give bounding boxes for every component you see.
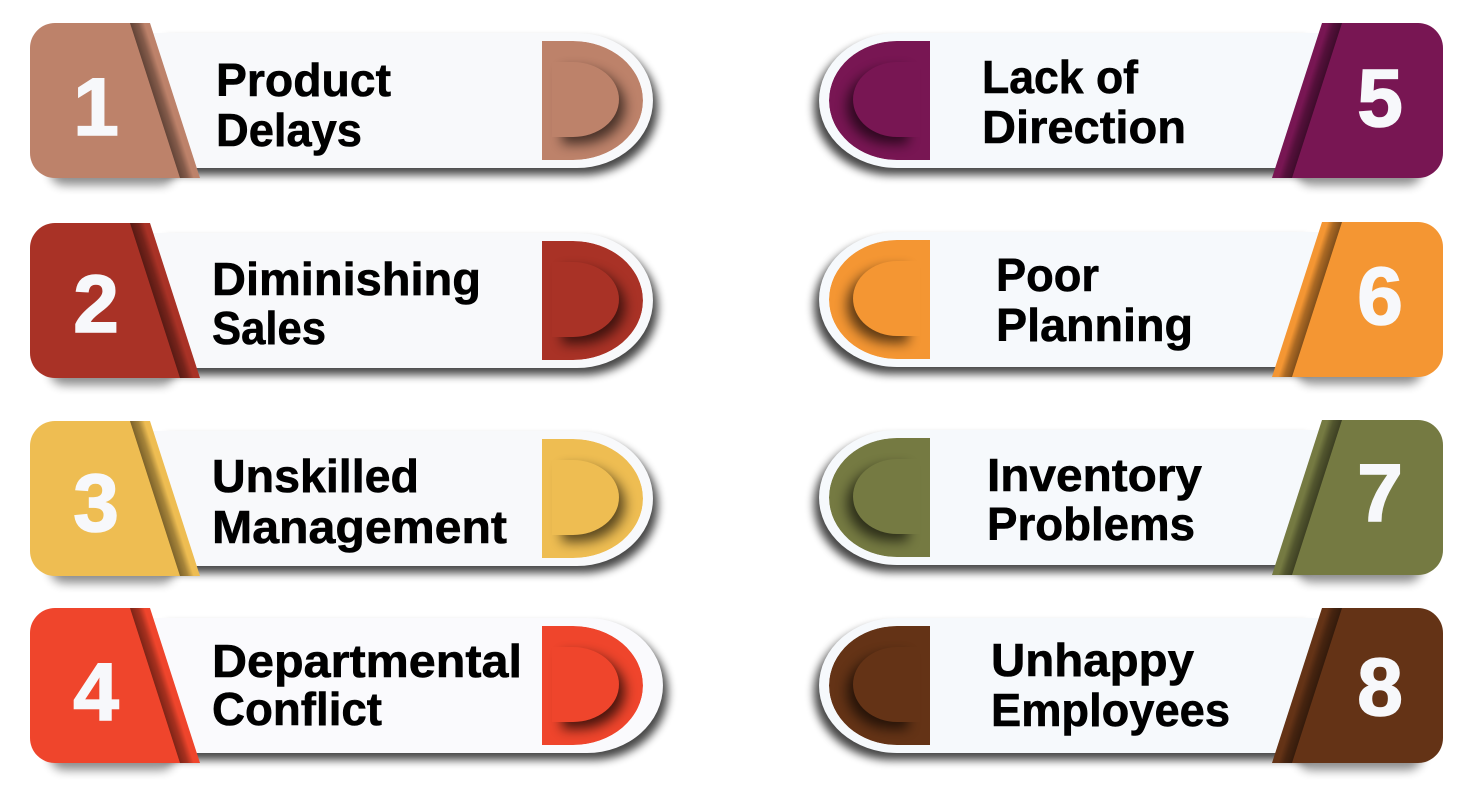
fold xyxy=(1272,420,1342,575)
fold xyxy=(1272,222,1342,377)
number 2: 2 xyxy=(73,259,119,350)
fold xyxy=(130,23,200,178)
card 5: Lack of Direction xyxy=(814,23,1443,185)
pill shadow xyxy=(165,40,658,175)
tab shadow xyxy=(50,153,175,185)
pill shadow xyxy=(814,40,1307,175)
number 3: 3 xyxy=(73,458,119,549)
label: Direction xyxy=(982,101,1186,153)
fold xyxy=(1272,608,1342,763)
number 4: 4 xyxy=(73,647,119,738)
pill body xyxy=(150,618,663,753)
number tab xyxy=(1272,222,1443,377)
icon: half disc xyxy=(542,41,643,160)
label: Unhappy xyxy=(991,634,1194,686)
pill shadow xyxy=(165,240,658,375)
label: Unskilled xyxy=(212,450,419,502)
pill body xyxy=(819,618,1322,753)
pill shadow xyxy=(165,625,668,760)
pill shadow xyxy=(814,625,1307,760)
label: Diminishing xyxy=(212,253,481,305)
pill shadow xyxy=(814,437,1307,572)
pill shadow xyxy=(814,239,1307,374)
card 8: Unhappy Employees xyxy=(814,608,1443,770)
fold xyxy=(130,421,200,576)
icon: half disc xyxy=(829,41,930,160)
number 1: 1 xyxy=(73,62,119,153)
label: Management xyxy=(212,501,507,553)
number tab xyxy=(1272,608,1443,763)
number 5: 5 xyxy=(1357,53,1403,144)
number tab xyxy=(30,608,200,763)
label: Planning xyxy=(996,299,1193,351)
number tab xyxy=(30,421,200,576)
label: Product xyxy=(216,54,391,106)
card 4: Departmental Conflict xyxy=(30,608,668,770)
pill body xyxy=(150,233,653,368)
icon: half disc xyxy=(542,241,643,360)
label: Delays xyxy=(216,104,362,156)
tab shadow xyxy=(1297,352,1422,384)
tab shadow xyxy=(50,738,175,770)
icon: half disc xyxy=(542,439,643,558)
pill body xyxy=(150,431,653,566)
tab shadow xyxy=(1297,153,1422,185)
number tab xyxy=(1272,420,1443,575)
card 2: Diminishing Sales xyxy=(30,223,658,385)
number 7: 7 xyxy=(1357,448,1403,539)
icon: half disc xyxy=(829,240,930,359)
pill body xyxy=(819,430,1322,565)
number tab xyxy=(30,223,200,378)
number 6: 6 xyxy=(1357,251,1403,342)
label: Problems xyxy=(987,498,1195,550)
icon: half disc xyxy=(829,626,930,745)
fold xyxy=(130,223,200,378)
label: Departmental xyxy=(212,635,522,687)
label: Inventory xyxy=(987,449,1202,501)
tab shadow xyxy=(1297,550,1422,582)
label: Employees xyxy=(991,684,1230,736)
tab shadow xyxy=(1297,738,1422,770)
label: Poor xyxy=(996,249,1099,301)
fold xyxy=(130,608,200,763)
fold xyxy=(1272,23,1342,178)
card 1: Product Delays xyxy=(30,23,658,185)
pill body xyxy=(150,33,653,168)
pill shadow xyxy=(165,438,658,573)
number 8: 8 xyxy=(1357,642,1403,733)
card 6: Poor Planning xyxy=(814,222,1443,384)
label: Conflict xyxy=(212,683,382,735)
label: Lack of xyxy=(982,51,1139,103)
icon: half disc xyxy=(542,626,643,745)
card 3: Unskilled Management xyxy=(30,421,658,583)
pill body xyxy=(819,33,1322,168)
card 7: Inventory Problems xyxy=(814,420,1443,582)
icon: half disc xyxy=(829,438,930,557)
tab shadow xyxy=(50,551,175,583)
number tab xyxy=(1272,23,1443,178)
tab shadow xyxy=(50,353,175,385)
number tab xyxy=(30,23,200,178)
label: Sales xyxy=(212,302,326,354)
pill body xyxy=(819,232,1322,367)
